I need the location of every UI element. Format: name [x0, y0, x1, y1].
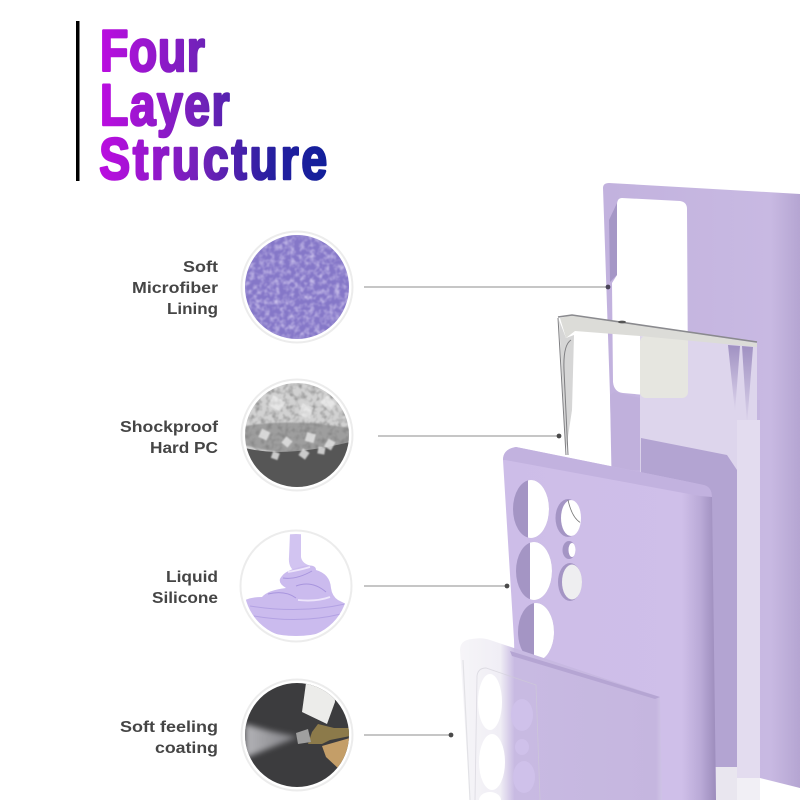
callout: liquid silicone: [152, 530, 509, 642]
layer: back microfiber lining case: [603, 183, 800, 800]
label: Microfiber: [132, 280, 218, 297]
callout: soft microfiber lining: [132, 232, 610, 342]
label: [120, 719, 218, 757]
callout: shockproof hard PC: [120, 380, 561, 490]
icon: clear PC pellets: [242, 380, 352, 490]
title accent bar: [76, 21, 80, 181]
label: [152, 569, 218, 607]
flash hole: [562, 541, 576, 559]
label: [120, 419, 219, 457]
label: [132, 259, 219, 318]
layer: soft feeling coating: [460, 638, 662, 800]
leader line: [364, 733, 453, 737]
coating camera holes: [478, 674, 535, 800]
label: Shockproof: [120, 419, 219, 436]
camera hole 1: [513, 480, 549, 538]
leader line: [378, 434, 561, 438]
label: Lining: [167, 301, 218, 318]
label: Hard PC: [150, 440, 218, 457]
callout: soft feeling coating: [120, 680, 453, 790]
phone case exploded view: [460, 183, 800, 800]
title: Structure: [99, 127, 327, 192]
icon: liquid silicone swirl: [240, 530, 352, 642]
label: coating: [155, 740, 218, 757]
camera hole 2: [556, 499, 581, 537]
layer: liquid silicone case: [503, 447, 716, 800]
camera hole 3: [516, 541, 554, 601]
icon: spray gun: [242, 680, 352, 790]
label: Soft feeling: [120, 719, 218, 736]
icon: microfiber texture: [242, 232, 352, 342]
label: Silicone: [152, 590, 218, 607]
layer: clear hard PC case: [558, 315, 760, 800]
leader line: [364, 584, 509, 588]
label: Soft: [183, 259, 219, 276]
title: Four: [100, 19, 205, 84]
camera hole 5: [518, 603, 554, 658]
title: Layer: [100, 73, 230, 138]
leader line: [364, 285, 610, 289]
label: Liquid: [166, 569, 218, 586]
title: [99, 19, 327, 192]
camera hole 4: [558, 563, 582, 601]
layer: strip of lining case over the clear case: [610, 392, 640, 470]
